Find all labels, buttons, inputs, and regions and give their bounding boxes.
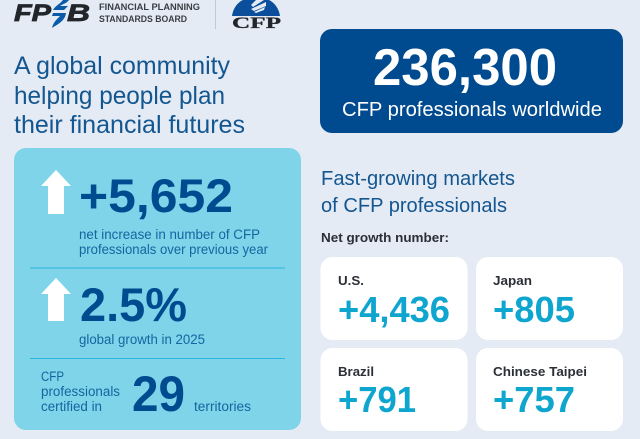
territories statement	[41, 366, 251, 422]
title	[14, 52, 245, 139]
territories statement: professionals	[41, 384, 120, 399]
logo: FPSB: STANDARDS BOARD	[99, 14, 187, 25]
subheading: Net growth number:	[321, 230, 449, 245]
icon: up arrow	[41, 170, 71, 214]
growth description: global growth in 2025	[79, 332, 205, 347]
panel: worldwide total: 236,300	[373, 39, 557, 97]
card: Japan: +805	[493, 289, 575, 330]
card: Brazil: +791	[338, 379, 416, 420]
territories statement: 29	[132, 366, 185, 422]
logo: FPSB: B	[67, 0, 90, 27]
logo: FPSB: FP	[14, 0, 52, 27]
panel: global growth stats	[14, 148, 301, 430]
title: their financial futures	[14, 111, 245, 139]
territories statement: CFP	[41, 369, 64, 384]
card: Chinese Taipei: Chinese Taipei	[493, 364, 587, 379]
card: Brazil	[320, 348, 468, 431]
net increase description: professionals over previous year	[79, 242, 268, 257]
card: U.S.: U.S.	[338, 273, 364, 288]
heading: fast-growing markets: Fast-growing markets	[321, 168, 515, 190]
logo: FPSB: FINANCIAL PLANNING	[99, 2, 200, 13]
logo: CFP	[232, 0, 281, 32]
territories statement: certified in	[41, 399, 102, 414]
title: A global community	[14, 52, 230, 80]
card: Japan	[476, 257, 623, 340]
net increase description	[79, 227, 268, 257]
icon: up arrow	[41, 278, 71, 321]
card: Brazil: Brazil	[338, 364, 374, 379]
logo: CFP: CFP	[232, 15, 281, 32]
logo: FPSB	[14, 0, 200, 28]
panel: worldwide total	[320, 29, 623, 133]
card: U.S.: +4,436	[338, 289, 450, 330]
card: U.S.	[320, 257, 468, 340]
growth percentage: 2.5%	[80, 278, 187, 331]
card: Chinese Taipei: +757	[493, 379, 575, 420]
territories statement: territories	[194, 399, 251, 414]
card: Chinese Taipei	[476, 348, 623, 431]
heading: fast-growing markets	[321, 168, 515, 217]
heading: fast-growing markets: of CFP professionals	[321, 195, 507, 217]
panel: worldwide total: CFP professionals worldwide	[342, 99, 602, 121]
card: Japan: Japan	[493, 273, 532, 288]
title: helping people plan	[14, 82, 225, 110]
net increase description: net increase in number of CFP	[79, 227, 260, 242]
net increase number: +5,652	[79, 169, 233, 222]
